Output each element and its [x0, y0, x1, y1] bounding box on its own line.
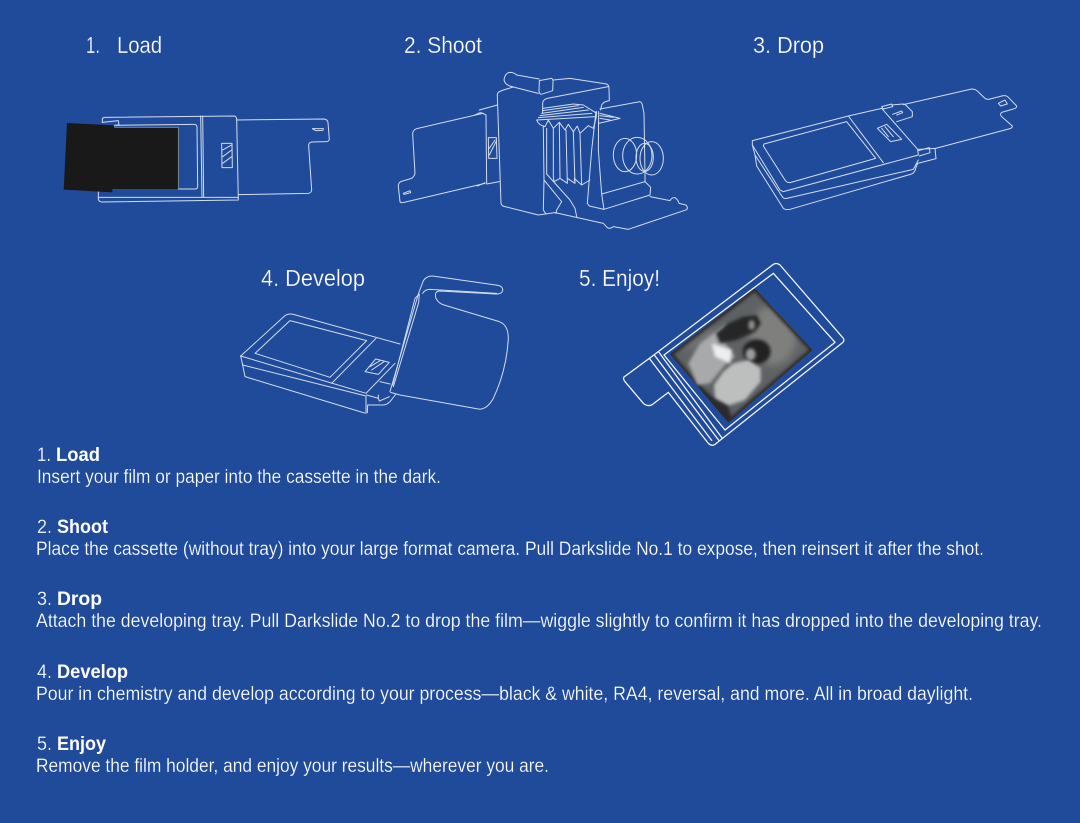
- text block: step 5 Enjoy: Remove the film holder, and enjoy your results—wherever you are.: [36, 756, 549, 777]
- text block: step 1 Load: Load: [56, 445, 100, 466]
- text block: step 2 Shoot: [36, 517, 984, 560]
- heading: step 1 Load: Load: [117, 32, 162, 58]
- text block: step 2 Shoot: 2.: [37, 517, 52, 538]
- heading: step 4 Develop: 4. Develop: [261, 265, 365, 291]
- text block: step 3 Drop: [36, 589, 1042, 632]
- heading: step 3 Drop: 3. Drop: [753, 32, 824, 58]
- film sheet: [64, 123, 178, 192]
- text block: step 4 Develop: Develop: [57, 662, 128, 683]
- text block: step 4 Develop: 4.: [37, 662, 52, 683]
- illustration: developing tray with open chemistry lid: [241, 276, 508, 413]
- text block: step 3 Drop: Drop: [57, 589, 102, 610]
- heading: step 5 Enjoy: 5. Enjoy!: [579, 265, 660, 291]
- text block: step 5 Enjoy: Enjoy: [57, 734, 106, 755]
- text block: step 1 Load: Insert your film or paper into the cassette in the dark.: [37, 467, 441, 488]
- text block: step 4 Develop: Pour in chemistry and develop according to your process—black & white, RA4, reversal, and more. All in broad daylight.: [36, 684, 973, 705]
- text block: step 2 Shoot: Place the cassette (without tray) into your large format camera. Pull Darkslide No.1 to expose, then reinsert it after the shot.: [36, 539, 984, 560]
- photo: two seated figures: [670, 288, 813, 423]
- text block: step 4 Develop: [36, 662, 973, 705]
- text block: step 1 Load: [37, 445, 441, 488]
- illustration: large format camera with cassette: [398, 72, 687, 229]
- text block: step 1 Load: 1.: [37, 445, 51, 466]
- text block: step 2 Shoot: Shoot: [57, 517, 109, 538]
- text block: step 5 Enjoy: [36, 734, 549, 777]
- heading: step 2 Shoot: 2. Shoot: [404, 32, 483, 58]
- heading: step 1 Load: 1.: [86, 32, 100, 58]
- text block: step 3 Drop: 3.: [37, 589, 52, 610]
- illustration: finished print in film holder with photo: [624, 263, 844, 445]
- illustration: cassette on developing tray with darkslide pulled: [752, 89, 1017, 210]
- illustration: cassette being loaded with film: [64, 116, 329, 202]
- text block: step 5 Enjoy: 5.: [37, 734, 52, 755]
- heading: step 1 Load: [86, 32, 162, 58]
